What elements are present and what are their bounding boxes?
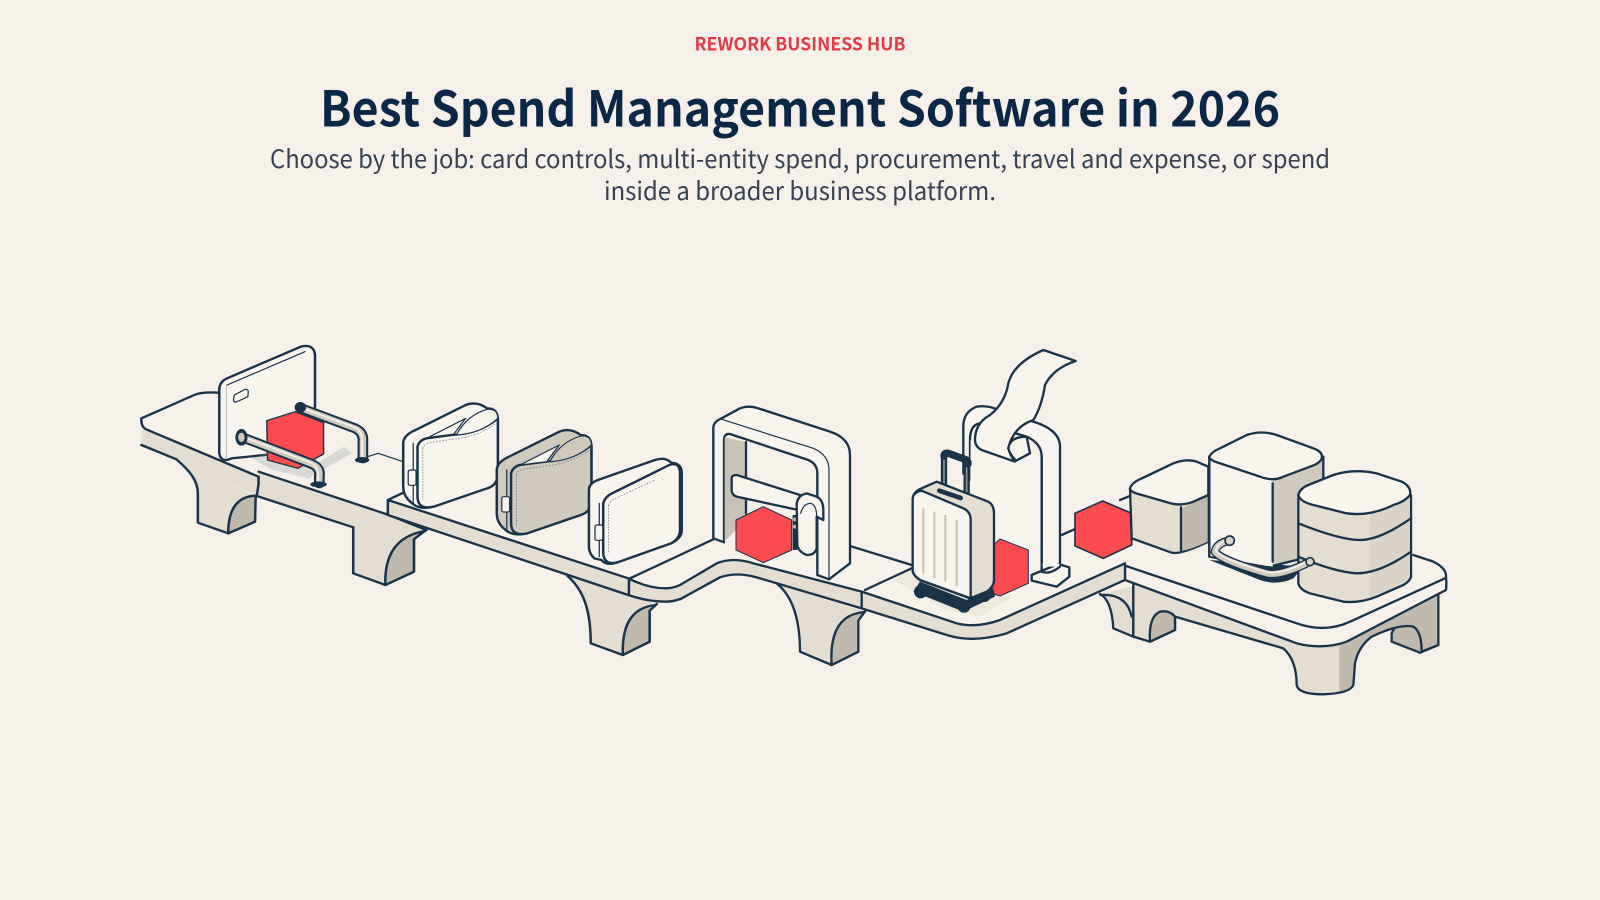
- hexagon token behind luggage: [992, 539, 1028, 596]
- connector pipe between boxes: [1215, 536, 1314, 574]
- icon: wallet closed: [589, 459, 682, 564]
- icon: small storage box: [1130, 460, 1208, 553]
- right platform with legs: [1100, 537, 1446, 694]
- eyebrow: brand name: REWORK BUSINESS HUB: [694, 30, 906, 56]
- title: Best Spend Management Software in 2026: [320, 70, 1280, 142]
- illustration: spend conveyor: [141, 346, 1446, 694]
- red hexagon token: [267, 412, 324, 468]
- exit hexagon token: [1075, 501, 1132, 558]
- icon: stacked database: [1298, 471, 1411, 602]
- axle: wallet connectors: [478, 461, 592, 504]
- subtitle: Choose by the job: card controls, multi-entity spend, procurement, travel and expense, or spend: [270, 140, 1330, 176]
- receipt paper strip: [975, 350, 1076, 462]
- icon: tall storage box: [1209, 432, 1323, 583]
- icon: card chip: [234, 389, 248, 402]
- subtitle: [270, 140, 1330, 208]
- left platform segment with legs: [141, 392, 426, 585]
- icon: wallet open tan: [497, 430, 591, 534]
- middle platform segments with wave edge: [388, 490, 680, 655]
- subtitle: inside a broader business platform.: [604, 172, 996, 208]
- icon: approval gate: [713, 407, 850, 579]
- icon: payment card: [219, 346, 369, 487]
- icon: luggage suitcase: [913, 453, 995, 613]
- gate arm: [732, 475, 800, 510]
- icon: wallet open white: [403, 403, 498, 508]
- icon: receipt printer: [963, 350, 1076, 596]
- gate hexagon token: [736, 507, 792, 563]
